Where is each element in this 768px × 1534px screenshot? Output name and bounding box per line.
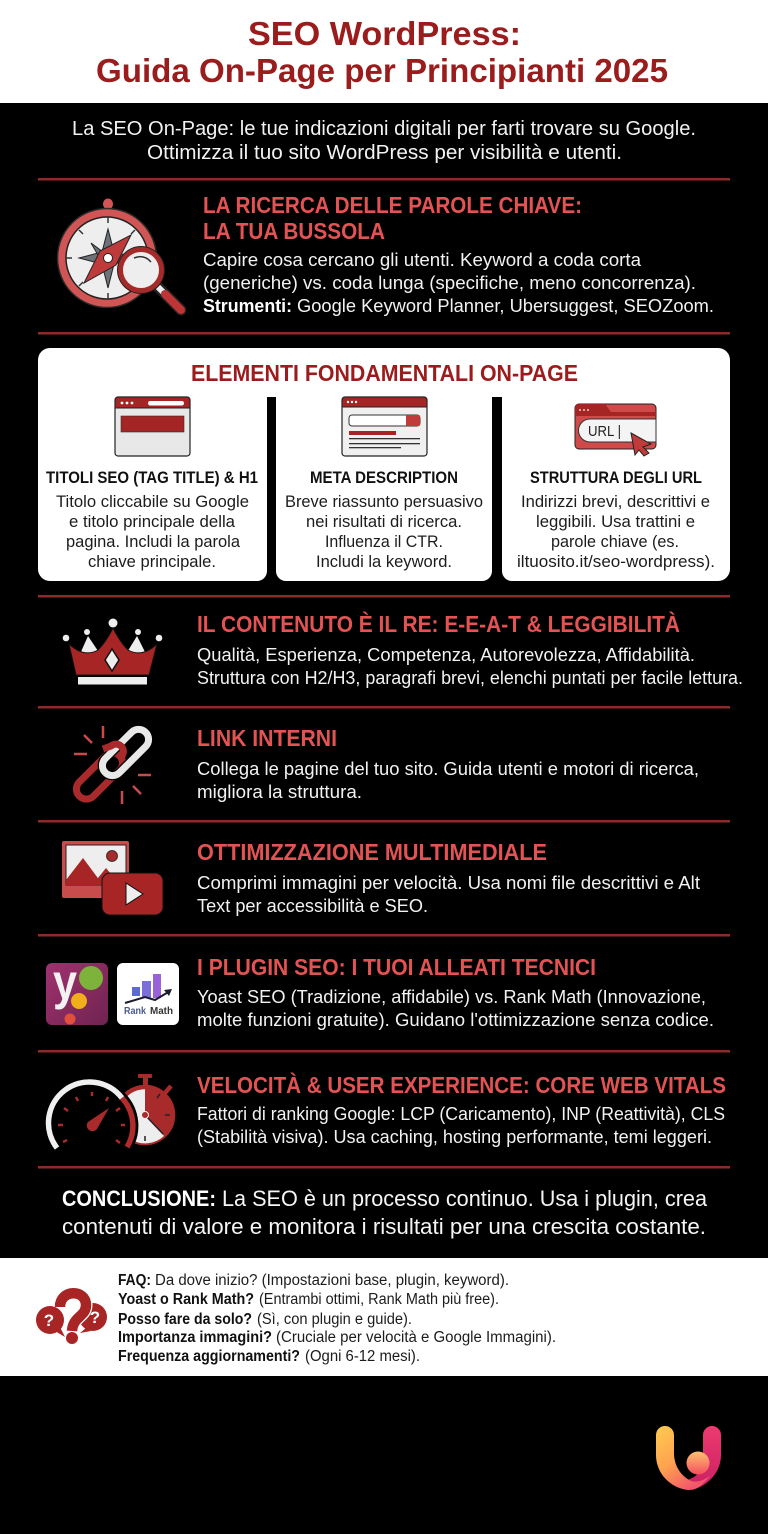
- text: keyword research: Capire cosa cercano gli utenti. Keyword a coda corta: [203, 249, 642, 270]
- icon: question marks: ?: [44, 1311, 54, 1330]
- text: plugins: Yoast SEO (Tradizione, affidabile) vs. Rank Math (Innovazione,: [197, 986, 706, 1007]
- text: FAQ: (Entrambi ottimi, Rank Math più free).: [259, 1291, 499, 1308]
- text: FAQ: FAQ:: [118, 1272, 151, 1289]
- panel: multimedia: [62, 839, 700, 916]
- card: meta description: Breve riassunto persuasivo: [285, 492, 483, 511]
- text: internal links: migliora la struttura.: [197, 781, 362, 802]
- conclusion: contenuti di valore e monitora i risultati per una crescita costante.: [62, 1214, 706, 1239]
- text: FAQ: [118, 1272, 556, 1365]
- card: meta description: [285, 397, 483, 571]
- intro text: La SEO On-Page: le tue indicazioni digitali per farti trovare su Google.: [72, 118, 696, 140]
- text: FAQ: Frequenza aggiornamenti?: [118, 1348, 300, 1365]
- text: FAQ: Posso fare da solo?: [118, 1311, 252, 1328]
- icon: Yoast logo: [46, 954, 108, 1025]
- icon: question marks: [36, 1293, 107, 1344]
- text: speed: [197, 1103, 725, 1147]
- text: internal links: Collega le pagine del tuo sito. Guida utenti e motori di ricerca,: [197, 758, 699, 779]
- panel: plugins: [46, 954, 714, 1030]
- icon: chain link: [72, 725, 153, 804]
- card: SEO titles: e titolo principale della: [69, 512, 236, 531]
- panel: keyword research: [58, 192, 714, 316]
- card: SEO titles: pagina. Includi la parola: [66, 532, 241, 551]
- text: keyword research: Strumenti:: [203, 295, 292, 316]
- panel: on-page fundamentals: [38, 348, 730, 581]
- title: SEO WordPress:: [248, 15, 521, 52]
- card: SEO titles: Titolo cliccabile su Google: [56, 492, 249, 511]
- text: multimedia: Comprimi immagini per velocità. Usa nomi file descrittivi e Alt: [197, 872, 700, 893]
- icon: speedometer and stopwatch: [48, 1074, 173, 1148]
- card: SEO titles: chiave principale.: [88, 552, 216, 571]
- icon: crown: [63, 618, 162, 684]
- heading: multimedia: OTTIMIZZAZIONE MULTIMEDIALE: [197, 839, 547, 865]
- intro text: [72, 118, 696, 164]
- panel: FAQ: [0, 1258, 768, 1376]
- card: URL structure: iltuosito.it/seo-wordpress).: [517, 552, 715, 571]
- text: multimedia: Text per accessibilità e SEO.: [197, 895, 428, 916]
- text: FAQ: Importanza immagini?: [118, 1329, 272, 1346]
- card: URL structure: parole chiave (es.: [551, 532, 679, 551]
- text: content: Struttura con H2/H3, paragrafi brevi, elenchi puntati per facile lettura.: [197, 667, 743, 688]
- text: keyword research: (generiche) vs. coda lunga (specifiche, meno concorrenza).: [203, 272, 696, 293]
- text: FAQ: (Ogni 6-12 mesi).: [305, 1348, 420, 1365]
- icon: URL bar with cursor: URL |: [588, 423, 621, 440]
- panel: content: [63, 610, 743, 688]
- heading: keyword research: LA RICERCA DELLE PAROLE CHIAVE:: [203, 192, 582, 218]
- icon: Rank Math logo: Rank: [124, 1006, 146, 1017]
- icon: browser with search result: [342, 397, 427, 456]
- icon: Yoast logo: y: [53, 954, 77, 1010]
- panel: internal links: [72, 725, 699, 804]
- card: URL structure: leggibili. Usa trattini e: [536, 512, 695, 531]
- icon: Rank Math logo: Math: [150, 1006, 173, 1017]
- text: keyword research: [203, 249, 714, 316]
- text: FAQ: Da dove inizio? (Impostazioni base, plugin, keyword).: [155, 1272, 509, 1289]
- heading: keyword research: [203, 192, 582, 244]
- text: keyword research: Google Keyword Planner, Ubersuggest, SEOZoom.: [297, 295, 714, 316]
- text: multimedia: [197, 872, 700, 916]
- card: meta description: nei risultati di ricerca.: [306, 512, 462, 531]
- card: URL structure: [517, 404, 715, 571]
- text: FAQ: (Cruciale per velocità e Google Immagini).: [276, 1329, 556, 1346]
- card: meta description: META DESCRIPTION: [310, 469, 458, 487]
- conclusion: [62, 1186, 708, 1239]
- card: SEO titles: [46, 397, 258, 571]
- heading: internal links: LINK INTERNI: [197, 725, 337, 751]
- title: Guida On-Page per Principianti 2025: [96, 52, 668, 89]
- text: FAQ: (Sì, con plugin e guide).: [257, 1311, 412, 1328]
- card: URL structure: STRUTTURA DEGLI URL: [530, 469, 702, 487]
- title: [96, 15, 668, 89]
- icon: URL bar with cursor: [575, 404, 656, 456]
- text: speed: (Stabilità visiva). Usa caching, hosting performante, temi leggeri.: [197, 1126, 712, 1147]
- panel: speed: [48, 1071, 726, 1148]
- heading: content: IL CONTENUTO È IL RE: E-E-A-T & LEGGIBILITÀ: [197, 610, 680, 637]
- text: plugins: molte funzioni gratuite). Guidano l'ottimizzazione senza codice.: [197, 1009, 714, 1030]
- logo: [656, 1426, 721, 1490]
- title banner: [0, 0, 768, 103]
- heading: keyword research: LA TUA BUSSOLA: [203, 218, 385, 244]
- card: meta description: Influenza il CTR.: [325, 532, 443, 551]
- icon: question marks: ?: [90, 1308, 100, 1327]
- icon: Rank Math logo: [117, 963, 179, 1025]
- conclusion: CONCLUSIONE:: [62, 1186, 216, 1211]
- text: FAQ: Yoast o Rank Math?: [118, 1291, 254, 1308]
- card: URL structure: Indirizzi brevi, descrittivi e: [521, 492, 710, 511]
- icon: image and video: [62, 841, 163, 915]
- card: SEO titles: TITOLI SEO (TAG TITLE) & H1: [46, 469, 258, 487]
- heading: plugins: I PLUGIN SEO: I TUOI ALLEATI TECNICI: [197, 954, 596, 980]
- text: plugins: [197, 986, 714, 1030]
- card: meta description: Includi la keyword.: [316, 552, 452, 571]
- text: speed: Fattori di ranking Google: LCP (Caricamento), INP (Reattività), CLS: [197, 1103, 725, 1124]
- intro text: Ottimizza il tuo sito WordPress per visibilità e utenti.: [147, 142, 622, 164]
- heading: on-page fundamentals: ELEMENTI FONDAMENTALI ON-PAGE: [191, 360, 578, 386]
- conclusion: La SEO è un processo continuo. Usa i plugin, crea: [222, 1186, 708, 1211]
- icon: browser with title bar: [115, 397, 190, 456]
- text: content: [197, 644, 743, 688]
- text: internal links: [197, 758, 699, 802]
- text: content: Qualità, Esperienza, Competenza, Autorevolezza, Affidabilità.: [197, 644, 695, 665]
- icon: compass and magnifier: [58, 198, 181, 310]
